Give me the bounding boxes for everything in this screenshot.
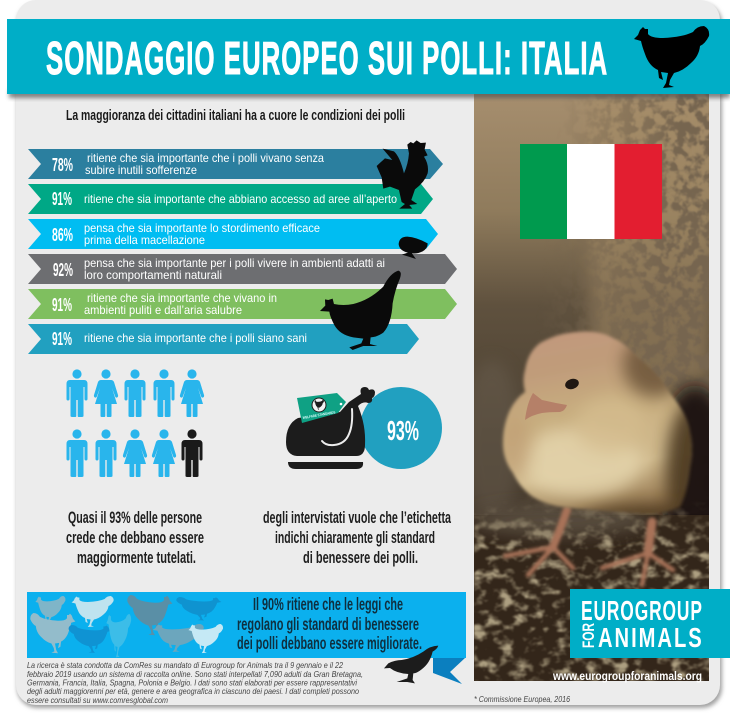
logo: Eurogroup for Animals: ANIMALS bbox=[598, 623, 702, 654]
chevron 78% bbox=[28, 149, 443, 179]
chevron 92%: 92% bbox=[53, 260, 73, 280]
badge: 93% circle bbox=[360, 387, 442, 469]
ribbon tail bbox=[433, 658, 465, 684]
chevron 86%: 86% bbox=[52, 225, 73, 245]
text: people caption: Quasi il 93% delle persone bbox=[68, 509, 202, 527]
icon grid: people 93% bbox=[66, 369, 204, 477]
subtitle: La maggioranza dei cittadini italiani ha a cuore le condizioni dei polli bbox=[66, 107, 405, 124]
chevron 92%: loro comportamenti naturali bbox=[84, 268, 222, 282]
source note: * Commissione Europea, 2016 bbox=[474, 694, 570, 704]
title: SONDAGGIO EUROPEO SUI POLLI: ITALIA bbox=[46, 32, 607, 84]
logo: Eurogroup for Animals bbox=[570, 589, 730, 658]
text: people caption: maggiormente tutelati. bbox=[77, 549, 196, 567]
chevron 91% healthy: 91% bbox=[52, 329, 72, 349]
chevron 78%: 78% bbox=[52, 155, 73, 175]
footnote: methodology: La ricerca è stata condotta da ComRes su mandato di Eurogroup for Animals tra il 9 gennaio e il 22 bbox=[27, 660, 343, 670]
icon: hen pecking bbox=[384, 646, 438, 683]
chevron 86%: prima della macellazione bbox=[84, 233, 205, 247]
banner text: regolano gli standard di benessere bbox=[237, 614, 419, 634]
Italian flag bbox=[520, 144, 662, 239]
text: label caption: di benessere dei polli. bbox=[303, 549, 418, 567]
banner text bbox=[237, 594, 422, 653]
chevron 78%: subire inutili sofferenze bbox=[85, 163, 197, 177]
text: people caption: crede che debbano essere bbox=[66, 529, 204, 547]
icon: large hen bbox=[320, 271, 401, 350]
photo: chick on litter bbox=[474, 94, 709, 681]
banner text: dei polli debbano essere migliorate. bbox=[237, 633, 422, 653]
chevron 86%: pensa che sia importante lo stordimento efficace bbox=[84, 221, 320, 235]
chevron 91% outdoor: 91% bbox=[52, 189, 72, 209]
icon: roast chicken with label: WELFARE STANDARDS bbox=[302, 410, 336, 420]
logo: Eurogroup for Animals: EUROGROUP bbox=[581, 595, 702, 626]
icon: chick bbox=[399, 237, 428, 259]
chevron 91% outdoor: ritiene che sia importante che abbiano accesso ad aree all’aperto bbox=[84, 192, 397, 206]
hens illustration bbox=[30, 595, 223, 657]
header shadow bbox=[9, 90, 730, 98]
footnote: methodology bbox=[27, 660, 363, 705]
footnote: methodology: Germania, Francia, Italia, Spagna, Polonia e Belgio. I dati sono stati elaborati per essere rappresentativi bbox=[27, 678, 358, 688]
text: label caption: indichi chiaramente gli standard bbox=[275, 529, 435, 547]
banner text: Il 90% ritiene che le leggi che bbox=[253, 594, 403, 614]
chick beak bbox=[525, 393, 567, 420]
icon: rooster bbox=[377, 140, 428, 209]
chevron 86% bbox=[28, 219, 438, 249]
chick body bbox=[501, 330, 694, 514]
chick eye bbox=[565, 378, 579, 390]
text: label caption bbox=[263, 509, 452, 567]
chevron 91% clean air: ambienti puliti e dall’aria salubre bbox=[84, 303, 242, 317]
chick legs bbox=[505, 510, 673, 585]
footnote: methodology: essere consultati su www.comresglobal.com bbox=[27, 695, 168, 705]
header band bbox=[7, 19, 730, 94]
logo: Eurogroup for Animals: FOR bbox=[579, 623, 598, 648]
chevron 91% clean air: 91% bbox=[52, 295, 72, 315]
blue banner bbox=[27, 592, 466, 658]
chevron 91% healthy bbox=[28, 324, 419, 354]
website url: www.eurogroupforanimals.org bbox=[552, 671, 702, 683]
chevron 91% outdoor bbox=[28, 184, 433, 214]
footnote: methodology: degli adulti maggiorenni per età, genere e area geografica in ciascuno dei paesi. I dati completi possono bbox=[27, 686, 359, 696]
footnote: methodology: febbraio 2019 usando un sistema di raccolta online. Sono stati interpellati 7,090 adulti da Gran Bretagna, bbox=[27, 669, 363, 679]
icon: roast chicken with label bbox=[286, 387, 375, 469]
chevron 91% healthy: ritiene che sia importante che i polli siano sani bbox=[84, 331, 307, 345]
icon: hen in header bbox=[634, 26, 709, 88]
chevron 91% clean air: ritiene che sia importante che vivano in bbox=[87, 291, 277, 305]
badge: 93% circle: 93% bbox=[387, 415, 419, 446]
chevron 92% bbox=[28, 254, 457, 284]
text: label caption: degli intervistati vuole che l’etichetta bbox=[263, 509, 452, 527]
text: people caption bbox=[66, 509, 204, 567]
chevron 78%: ritiene che sia importante che i polli vivano senza bbox=[87, 151, 324, 165]
chevron 92%: pensa che sia importante per i polli vivere in ambienti adatti ai bbox=[84, 256, 385, 270]
chevron 91% clean air bbox=[28, 289, 457, 319]
